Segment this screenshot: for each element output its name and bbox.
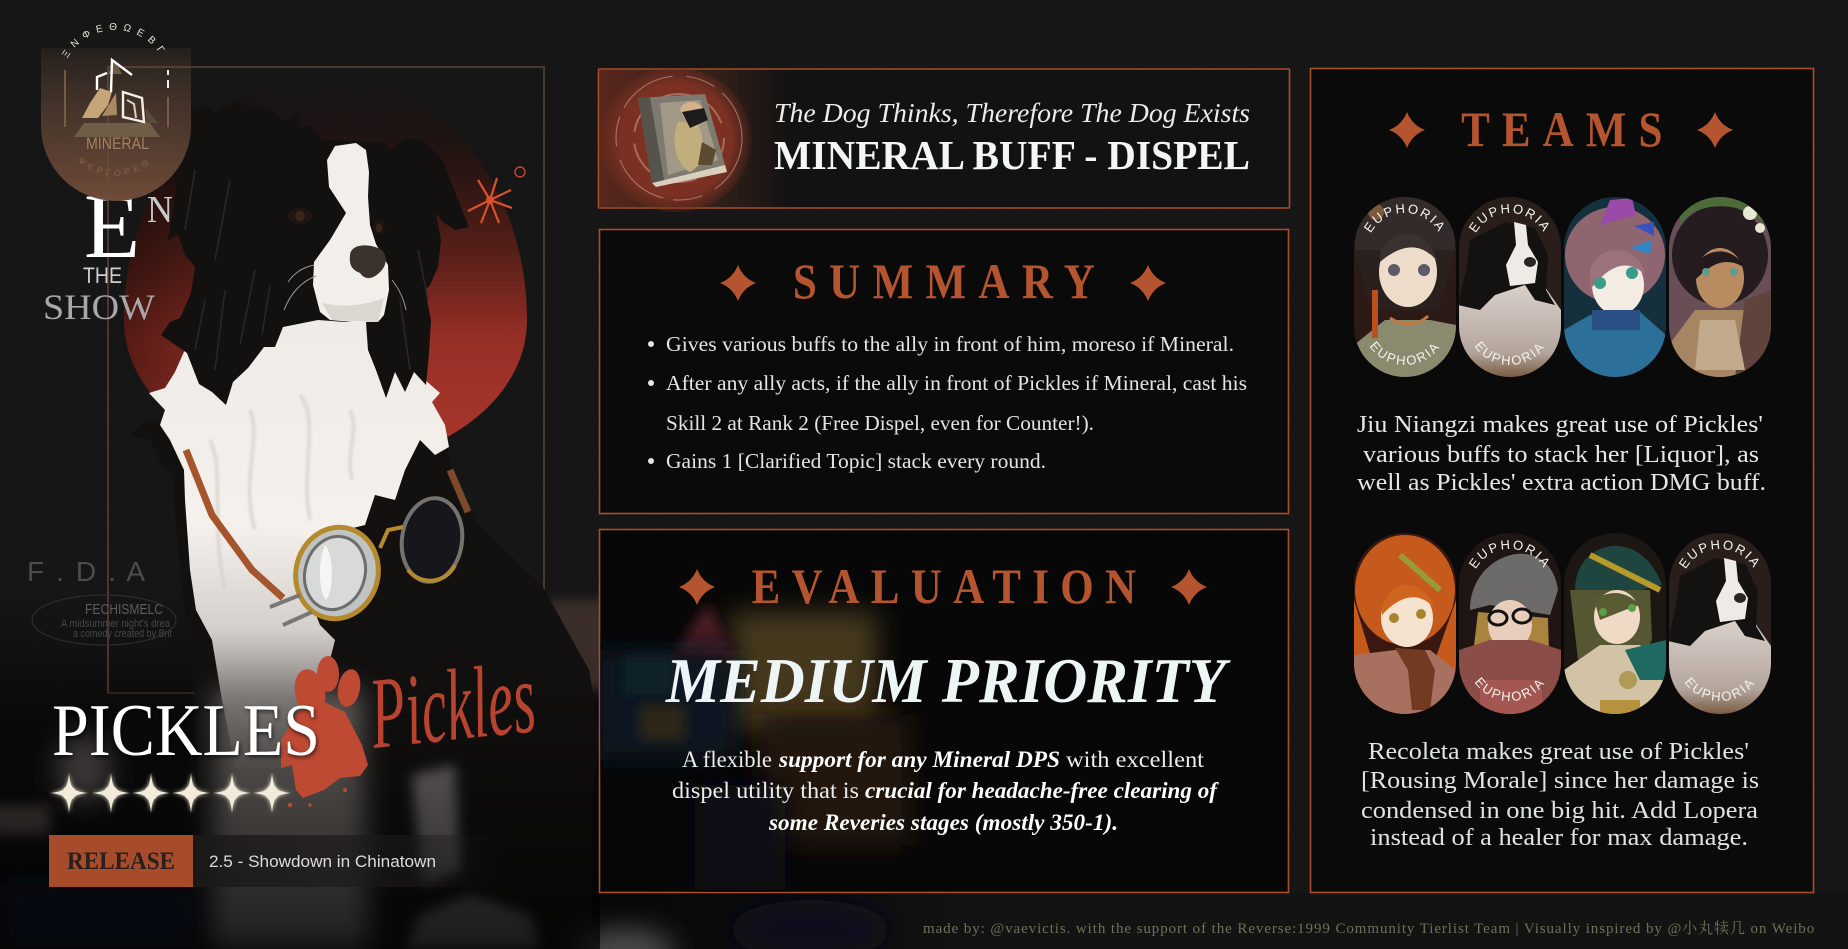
release tag: 2.5 - Showdown in Chinatown: [209, 852, 436, 871]
summary heading: [720, 254, 1166, 310]
character name: PICKLES: [52, 690, 320, 772]
portrait: sonetto in hat: [1459, 533, 1561, 714]
chest fur shading: [210, 395, 354, 590]
psychube title: The Dog Thinks, Therefore The Dog Exists: [774, 98, 1250, 128]
portrait: lopera in teal cap: [1564, 533, 1666, 714]
footer credit: made by: @vaevictis. with the support of the Reverse:1999 Community Tierlist Team | Visually inspired by @小丸犊几 on Weibo: [923, 919, 1815, 937]
nose: [350, 245, 386, 278]
poster text: F.D.A stamp: F . D . A: [27, 556, 145, 587]
poster text: F.D.A stamp: [27, 556, 176, 645]
panel: psychube header: [598, 68, 1290, 212]
red sun circle: [124, 72, 527, 466]
dog chest white fur: [149, 315, 449, 770]
white blaze and muzzle: [313, 143, 389, 322]
portrait: jiu niangzi: [1354, 195, 1456, 377]
euphoria labels team two: EUPHORIA: [1685, 677, 1754, 701]
evaluation paragraph: crucial for headache-free clearing of: [865, 778, 1219, 803]
euphoria labels team two: EUPHORIA: [1468, 540, 1548, 568]
poster text: F.D.A stamp: A midsummer night's drea: [61, 618, 171, 630]
poster text: enter the show: E: [84, 175, 140, 277]
euphoria labels team one: [1364, 204, 1548, 365]
evaluation paragraph: [672, 747, 1219, 835]
release tag: RELEASE: [67, 848, 175, 875]
euphoria labels team one: EUPHORIA: [1364, 204, 1444, 232]
euphoria labels team one: EUPHORIA: [1468, 204, 1548, 232]
euphoria labels team two: EUPHORIA: [1678, 540, 1758, 568]
euphoria labels team two: EUPHORIA: [1474, 677, 1544, 701]
panel: summary: [600, 230, 1288, 514]
summary bullets: Skill 2 at Rank 2 (Free Dispel, even for Counter!).: [666, 411, 1094, 435]
poster text: F.D.A stamp: a comedy created by Brit: [73, 628, 172, 640]
team two description: condensed in one big hit. Add Lopera: [1361, 798, 1758, 824]
poster text: F.D.A stamp: FECHISMELC: [85, 601, 163, 618]
leather strap: [186, 450, 468, 598]
psychube subtitle: MINERAL BUFF - DISPEL: [774, 132, 1250, 178]
portrait: recoleta: [1354, 533, 1456, 714]
teams heading: TEAMS: [1461, 102, 1662, 158]
team two description: [1361, 739, 1759, 851]
dog body: [150, 400, 600, 949]
team two description: instead of a healer for max damage.: [1370, 825, 1748, 851]
priority rating: MEDIUM PRIORITY: [665, 645, 1231, 716]
head fur texture: [185, 170, 428, 370]
portrait: pickles dog second: [1668, 533, 1771, 714]
arc text top: ΞΝΦΕΘΩΕΒΓ: [62, 23, 165, 58]
muzzle shadow: [322, 298, 384, 322]
mineral icon: [74, 60, 160, 137]
paw print red: [281, 656, 368, 807]
evaluation paragraph: some Reveries stages (mostly 350-1).: [768, 810, 1118, 835]
portrait: pickles dog: [1458, 197, 1561, 377]
team one description: [1357, 412, 1766, 496]
six rarity stars: [50, 773, 291, 813]
euphoria labels team two: [1468, 540, 1758, 701]
blurred toy scene behind the dog: [0, 590, 1848, 949]
poster text: enter the show: SHOW: [43, 287, 155, 327]
mineral label: MINERAL: [86, 134, 149, 153]
evaluation paragraph: support for any Mineral DPS: [778, 747, 1060, 772]
bottom fade over dog: [0, 650, 600, 949]
release tag: [49, 835, 500, 887]
badge side lines: [65, 70, 168, 127]
summary bullets: [648, 332, 1247, 473]
summary bullets: After any ally acts, if the ally in front of Pickles if Mineral, cast his: [666, 371, 1247, 395]
summary bullets: Gains 1 [Clarified Topic] stack every round.: [666, 449, 1046, 473]
icon: psychube book: [600, 68, 752, 212]
eyes: [288, 208, 385, 235]
blurred toys seen through panel: [595, 602, 910, 890]
teams heading: [1389, 102, 1733, 158]
team one description: various buffs to stack her [Liquor], as: [1363, 442, 1759, 468]
evaluation paragraph: dispel utility that is: [672, 778, 859, 803]
poster text: enter the show: N: [147, 189, 173, 231]
poster text: enter the show: [43, 175, 173, 327]
dog legs: [212, 690, 540, 949]
black tuft on shoulder: [130, 418, 172, 475]
dog head and ruff black fur: [161, 104, 469, 405]
signature pickles: Pickles: [364, 641, 541, 771]
arc text bottom: ΨΕΡΓΟΡΕΘ: [80, 157, 148, 176]
team two description: [Rousing Morale] since her damage is: [1361, 768, 1759, 794]
panel: teams: [1310, 68, 1814, 894]
dog illustration: [130, 104, 600, 949]
monocle glasses: [270, 494, 468, 628]
euphoria labels team one: EUPHORIA: [1475, 341, 1544, 365]
evaluation heading: EVALUATION: [752, 559, 1136, 615]
portrait: girl with blue bows: [1564, 197, 1666, 377]
panel: evaluation: [595, 530, 1288, 892]
asterisk ornament: [468, 167, 525, 223]
blurred white toy at page bottom: [575, 928, 675, 949]
summary heading: SUMMARY: [793, 254, 1095, 310]
evaluation paragraph: with excellent: [1066, 747, 1205, 772]
summary bullets: Gives various buffs to the ally in front of him, moreso if Mineral.: [666, 332, 1234, 356]
poster frame: [108, 67, 544, 693]
mineral afflatus badge: [41, 23, 191, 201]
portrait: green wreath girl: [1669, 195, 1771, 377]
euphoria labels team one: EUPHORIA: [1370, 341, 1440, 365]
evaluation paragraph: A flexible: [682, 747, 772, 772]
team one description: Jiu Niangzi makes great use of Pickles': [1357, 412, 1763, 438]
team two description: Recoleta makes great use of Pickles': [1368, 739, 1749, 765]
whiskers: [284, 265, 406, 310]
poster text: enter the show: THE: [83, 263, 122, 288]
team one description: well as Pickles' extra action DMG buff.: [1357, 470, 1766, 496]
